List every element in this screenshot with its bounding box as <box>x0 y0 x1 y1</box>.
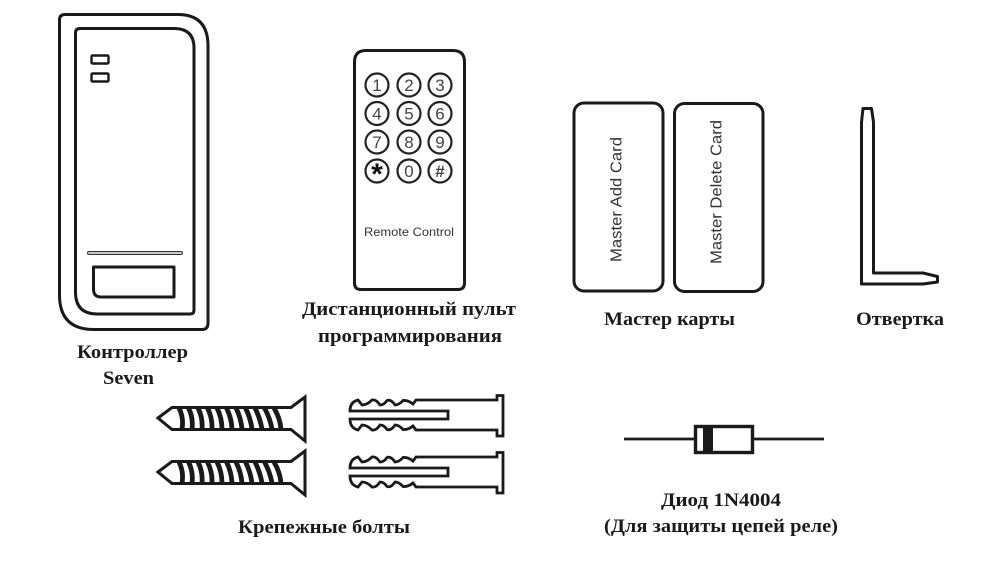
master delete card <box>674 104 763 292</box>
reader window <box>94 267 174 297</box>
diode <box>624 426 824 453</box>
keypad: 8 <box>404 133 414 152</box>
diode label: Диод 1N4004 <box>661 490 782 511</box>
diode label <box>604 490 838 537</box>
anchor bottom <box>350 452 503 493</box>
keypad: 7 <box>372 133 382 152</box>
keypad <box>366 74 452 191</box>
screw bottom <box>158 451 305 495</box>
reader slit <box>88 252 182 254</box>
indicator lights <box>92 56 108 82</box>
keypad: 6 <box>435 104 445 124</box>
fasteners label: Крепежные болты <box>238 517 410 538</box>
controller label: Seven <box>103 368 154 389</box>
remote label: программирования <box>318 326 502 347</box>
master add card <box>574 103 663 291</box>
remote caption: Remote Control <box>364 225 454 239</box>
keypad: 1 <box>372 76 382 95</box>
anchor top <box>350 396 503 436</box>
keypad: 4 <box>372 104 382 124</box>
keypad: 5 <box>404 104 414 124</box>
keypad: 3 <box>435 76 445 95</box>
keypad: * <box>371 158 383 191</box>
screwdriver label: Отвертка <box>856 309 945 330</box>
keypad: 9 <box>435 133 445 152</box>
keypad: # <box>435 162 445 181</box>
keypad: 2 <box>404 76 414 95</box>
keypad: 0 <box>404 162 414 181</box>
wall anchors <box>350 396 503 493</box>
controller device <box>60 14 208 330</box>
remote label: Дистанционный пульт <box>302 299 517 320</box>
master cards label: Мастер карты <box>604 309 735 330</box>
controller label <box>77 342 188 389</box>
screwdriver <box>862 108 938 284</box>
master add card: Master Add Card <box>608 137 626 262</box>
master delete card: Master Delete Card <box>708 120 726 264</box>
screw top <box>158 397 305 441</box>
screws <box>158 397 305 495</box>
controller label: Контроллер <box>77 342 188 363</box>
remote label <box>302 299 517 347</box>
diode label: (Для защиты цепей реле) <box>604 516 838 537</box>
remote control <box>354 50 464 290</box>
